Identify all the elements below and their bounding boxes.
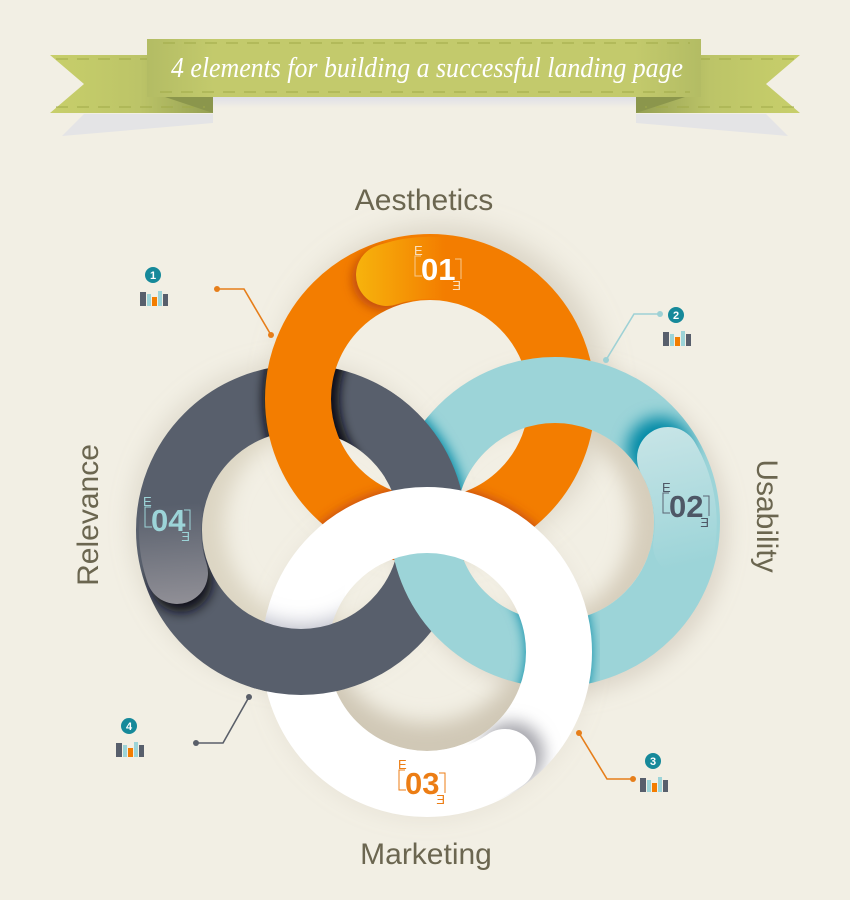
heading: Relevance: Relevance [72,444,105,586]
number label 04: 04 [151,503,186,538]
callout 2 [603,307,691,363]
number label 04 [143,494,190,544]
number label 02: E [700,515,709,530]
leader line 3 [576,730,636,782]
number label 01: E [452,278,461,293]
shadow of orange ring on slate ring [256,368,362,450]
shadow of slate ring on teal ring [424,412,468,490]
ground shadows of the rings [162,259,695,788]
callout 1 [140,267,274,338]
leader line 4 [193,694,252,746]
inner hole shading [202,428,654,751]
slate ring lower crossing over white [250,615,345,695]
ribbon front band [147,39,701,97]
badge 3: 3 [650,756,656,768]
number label 03: E [398,757,407,772]
ribbon right tail [636,55,800,113]
shadow of white ring on orange ring [318,486,540,560]
number label 02: 02 [669,489,703,524]
mini bar chart 4 [116,742,144,757]
badge 1: 1 [150,270,156,282]
number label 02 [662,480,709,530]
ring 02: teal ring [423,390,687,654]
number label 01 [414,243,461,293]
mini bar chart 1 [140,291,168,306]
number label 03: 03 [405,766,439,801]
heading: Usability: Usability [750,459,783,573]
title text: 4 elements for building a successful landing page [171,53,683,84]
shadow of white ring on teal ring [505,608,600,684]
tab: slate [150,515,212,612]
ribbon shadow [62,97,788,136]
leader line 1 [214,286,274,338]
ring 01: orange ring [298,267,562,531]
callout 3 [576,730,668,792]
number label 03: E [436,792,445,807]
mini bar chart 2 [663,331,691,346]
ring 04: slate ring [169,398,433,662]
ribbon left tail [50,55,213,113]
number label 04: E [143,494,152,509]
number label 04: E [181,529,190,544]
mini bar chart 3 [640,777,668,792]
number label 01: 01 [421,252,455,287]
tab: teal [627,417,693,545]
heading: Marketing: Marketing [360,838,492,871]
number label 03 [398,757,445,807]
shadow of slate ring on white ring [264,604,340,629]
number label 01: E [414,243,423,258]
ring 03: white ring [295,520,559,784]
title ribbon [50,39,800,136]
slate ring upper crossing over teal [385,388,462,491]
callout 4 [116,694,252,757]
heading: Aesthetics: Aesthetics [355,184,493,217]
tab: orange [348,237,432,314]
tab: white [430,722,544,786]
leader line 2 [603,311,663,363]
number label 02: E [662,480,671,495]
badge 2: 2 [673,310,679,322]
badge 4: 4 [126,721,133,733]
